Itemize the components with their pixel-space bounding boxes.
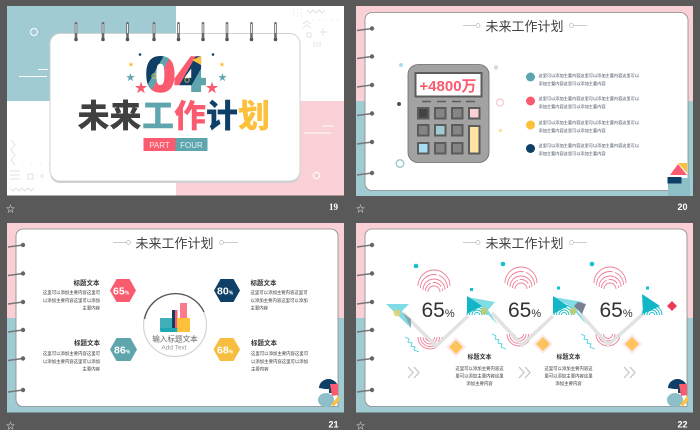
- footer 21: 21: [328, 420, 339, 430]
- hexagon 86%: 86%: [114, 344, 131, 356]
- text block bottom left: 这里可以添加主要内容这里可: [43, 350, 101, 357]
- center label: 输入标题文本: [152, 334, 198, 344]
- text block 2: 里可以添加主要内容这里: [544, 372, 593, 380]
- text block bottom right: 主要内容: [251, 366, 269, 372]
- text block top right: 这里可以添加主要内容这里可: [250, 289, 308, 296]
- decorative lines pink: [304, 126, 334, 133]
- heading: [463, 236, 587, 251]
- text block top right: [250, 278, 308, 312]
- text block top left: 标题文本: [74, 278, 100, 287]
- list: four bullet items: 添加主要内容这里可以添加主要内容: [538, 103, 606, 110]
- text block bottom right: 这里可以添加主要内容这里可: [251, 350, 309, 357]
- calculator amount: +4800万: [419, 78, 477, 95]
- text block bottom right: 以添加主要内容这里可以添加: [251, 358, 308, 365]
- hexagon 65%: [110, 279, 136, 302]
- hexagon 65%: 65%: [113, 286, 130, 298]
- center sublabel: Add Text: [161, 344, 187, 352]
- cover title: 未来: [78, 98, 142, 134]
- list: four bullet items: 添加主要内容这里可以添加主要内容: [538, 80, 606, 87]
- heading: 未来工作计划: [485, 19, 564, 34]
- list: four bullet items: 添加主要内容这里可以添加主要内容: [538, 127, 606, 134]
- footer 21: [6, 420, 339, 430]
- text block top left: 这里可以添加主要内容这里可: [43, 289, 101, 296]
- teal corner block: [7, 6, 176, 101]
- big number 04: 4: [175, 48, 206, 101]
- text block 2: 添加主要内容: [555, 380, 582, 387]
- text block bottom left: 标题文本: [74, 338, 100, 347]
- footer 19: ☆: [6, 204, 15, 214]
- heading: [113, 236, 238, 251]
- text block top left: 以添加主要内容这里可以添加: [43, 297, 100, 304]
- decorative lines teal: [19, 70, 48, 76]
- text block 1: 标题文本: [467, 353, 492, 361]
- cover title: 计: [206, 98, 238, 134]
- text block 1: 里可以添加主要内容这里: [455, 372, 504, 380]
- big number 04: [146, 48, 206, 101]
- footer 19: [6, 202, 338, 214]
- icon: calculator: [408, 64, 489, 162]
- footer 20: ☆: [356, 204, 365, 214]
- memphis pattern bottom left: [10, 140, 49, 191]
- cover title: 工: [142, 98, 174, 134]
- list: four bullet items: [526, 72, 640, 157]
- spiral binding: [357, 243, 374, 392]
- cyan squiggles: [405, 334, 595, 352]
- list: four bullet items: 添加主要内容这里可以添加主要内容: [538, 150, 606, 157]
- list: four bullet items: 这里可以添加主要内容这里可以添加主要内容这里可以: [538, 119, 640, 126]
- notebook card: [50, 34, 300, 181]
- list: four bullet items: 这里可以添加主要内容这里可以添加主要内容这里可以: [538, 72, 640, 79]
- decorative dots: [396, 63, 504, 167]
- text block 1: 这里可以添加主要内容这: [455, 365, 504, 372]
- part label: PART: [149, 141, 170, 150]
- spiral binding: [74, 22, 277, 41]
- yellow diamonds: [446, 334, 642, 357]
- text block 2: [544, 353, 593, 387]
- text block bottom right: [251, 338, 309, 372]
- panel: slide 20 calculator: [356, 6, 693, 196]
- percent 65 b: 65%: [508, 299, 541, 322]
- percent 65 a: 65%: [422, 299, 455, 322]
- text block top right: 以添加主要内容这里可以添加: [250, 297, 308, 304]
- heading: 未来工作计划: [135, 236, 214, 251]
- percent 65 c: 65%: [600, 299, 633, 322]
- panel: slide 21 hexagons: [7, 223, 344, 412]
- cover title: 作: [174, 98, 206, 134]
- text block top left: 主要内容: [82, 304, 101, 312]
- text block bottom left: 主要内容: [82, 366, 101, 372]
- red diamond: [667, 301, 677, 311]
- calculator keys: [418, 108, 480, 154]
- notebook card: [365, 229, 687, 406]
- big number 04: 0: [146, 48, 175, 101]
- cover title: 划: [238, 98, 270, 134]
- list: four bullet items: 这里可以添加主要内容这里可以添加主要内容这里可以: [538, 142, 640, 149]
- decorative ring pink: [313, 172, 320, 179]
- spiral binding: [8, 243, 25, 392]
- center circle: [144, 294, 206, 356]
- chevrons: [408, 367, 635, 378]
- ring arcs bottom: [418, 334, 620, 349]
- text block 2: 标题文本: [556, 353, 581, 361]
- stars around number: [126, 53, 227, 93]
- corner badge 4: [668, 163, 690, 196]
- calculator screen: [416, 73, 482, 96]
- notebook card shadow: [50, 35, 300, 183]
- panel: slide 19 cover: [7, 6, 344, 196]
- spiral binding: [357, 26, 374, 175]
- text block 2: 这里可以添加主要内容这: [544, 365, 593, 372]
- corner badge 3: [667, 379, 688, 407]
- part label: FOUR: [180, 141, 203, 150]
- part label: [144, 138, 208, 151]
- text block 1: [455, 353, 504, 387]
- hexagon 80%: 80%: [217, 286, 234, 298]
- text block top left: [43, 278, 101, 312]
- heading: [463, 19, 587, 34]
- text block top right: 标题文本: [250, 278, 277, 287]
- icon: bar chart: [160, 303, 190, 332]
- panel: slide 22 zigzag: [356, 223, 693, 412]
- corner badge 3: [318, 379, 339, 407]
- ring arcs top: [418, 267, 626, 292]
- zigzag line: [403, 313, 643, 346]
- decorative ring teal: [30, 28, 38, 36]
- text block bottom left: 以添加主要内容这里可以添加: [43, 358, 100, 365]
- hexagon 86%: [110, 338, 137, 361]
- cover title: [78, 98, 270, 134]
- hexagon 68%: [214, 338, 240, 361]
- footer 22: 22: [678, 420, 688, 430]
- footer 20: [356, 202, 688, 214]
- text block bottom left: [43, 338, 101, 372]
- hexagon 80%: [214, 279, 240, 302]
- cyan dots: [414, 262, 649, 291]
- memphis pattern top right: [293, 9, 338, 47]
- fan arcs: [467, 305, 662, 315]
- heading: 未来工作计划: [485, 236, 564, 251]
- footer 22: [356, 420, 688, 430]
- footer 19: 19: [329, 202, 338, 212]
- hexagon 68%: 68%: [217, 344, 234, 356]
- notebook card: [16, 229, 338, 406]
- text block 1: 添加主要内容: [466, 380, 493, 387]
- pink corner block: [176, 101, 344, 196]
- footer 20: 20: [678, 202, 688, 212]
- notebook card: [365, 12, 688, 190]
- text block bottom right: 标题文本: [251, 338, 278, 347]
- text block top right: 主要内容: [250, 304, 269, 312]
- teal arrows: [386, 294, 660, 328]
- list: four bullet items: 这里可以添加主要内容这里可以添加主要内容这里可以: [538, 95, 640, 102]
